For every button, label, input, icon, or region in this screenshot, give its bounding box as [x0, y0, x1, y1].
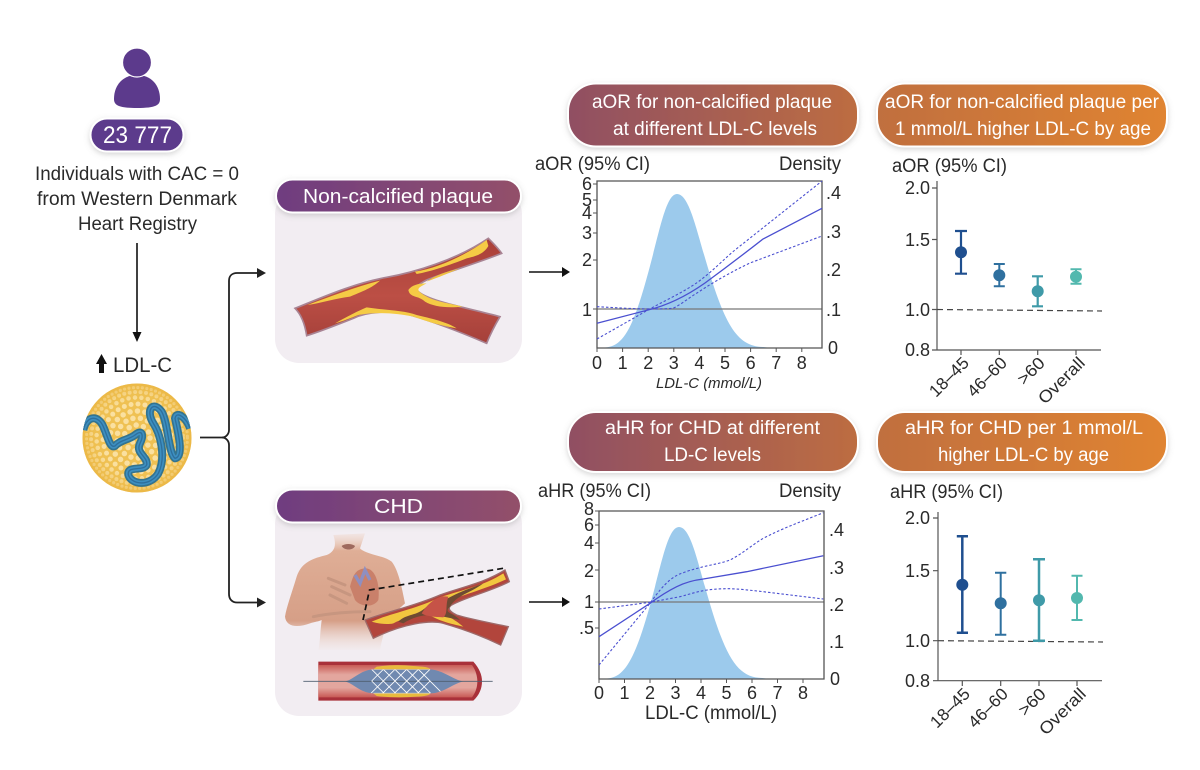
confidence limits [597, 181, 822, 339]
chart: aOR spline with density [535, 154, 841, 392]
chart: aHR spline with density: .3 [829, 558, 844, 578]
chart: aHR spline with density: 2 [645, 683, 655, 703]
chart: aOR per mmol/L by age: 1.0 [905, 300, 930, 320]
solid spline [599, 556, 823, 637]
point: Overall [1070, 269, 1082, 284]
icon: person [114, 48, 160, 108]
icon: LDL particle [82, 384, 192, 492]
text: cohort description: Individuals with CAC = 0 [35, 164, 239, 185]
chart: aHR spline with density: Density [779, 481, 841, 502]
solid spline [597, 208, 822, 323]
chart: aOR per mmol/L by age: 2.0 [905, 178, 930, 198]
chart: aHR spline with density: .4 [829, 520, 844, 540]
heading: aHR at different LD-C levels: LD-C levels [664, 445, 761, 466]
chart: aOR spline with density: 0 [828, 338, 838, 358]
heading: aHR per 1 mmol/L by age [877, 412, 1167, 472]
point: 18–45 [955, 231, 967, 274]
text: cohort description [35, 164, 239, 235]
chart: aHR spline with density: 4 [584, 533, 594, 553]
heading: CHD: CHD [374, 495, 423, 518]
point: >60 [1032, 276, 1044, 306]
heading: non-calcified plaque: Non-calcified plaque [303, 185, 493, 208]
chart: aOR spline with density: 4 [694, 353, 704, 373]
chart: aOR per mmol/L by age [892, 156, 1102, 408]
chart: aOR spline with density: 8 [797, 353, 807, 373]
chart: aHR spline with density: 7 [772, 683, 783, 703]
point: 18–45 [956, 536, 968, 633]
arrow: CHD to aHR chart [529, 597, 570, 607]
chart: aHR per mmol/L by age: >60 [1014, 684, 1050, 720]
chart: aOR spline with density: 2 [643, 353, 653, 373]
chart: aOR spline with density: 4 [582, 203, 592, 223]
chart: aHR spline with density: 0 [594, 683, 604, 703]
chart: aHR per mmol/L by age: aHR (95% CI) [890, 482, 1003, 503]
text: cohort description: from Western Denmark [37, 189, 238, 210]
chart: aHR per mmol/L by age: 18–45 [926, 684, 974, 732]
heading: non-calcified plaque [276, 180, 521, 212]
heading: aOR per 1 mmol/L by age: 1 mmol/L higher LDL-C by age [895, 119, 1151, 140]
chart: aHR spline with density: .5 [579, 618, 594, 638]
chart: aHR spline with density: .2 [829, 595, 844, 615]
density area [605, 194, 771, 348]
illustration: stent in artery [303, 662, 493, 701]
chart: aHR per mmol/L by age [890, 482, 1103, 739]
chart: aHR per mmol/L by age: 46–60 [964, 684, 1012, 732]
chart: aHR spline with density: 5 [721, 683, 732, 703]
chart: aOR spline with density: 6 [746, 353, 756, 373]
arrow: plaque to aOR chart [529, 267, 570, 277]
confidence limits [599, 513, 823, 665]
heading: aOR at different LDL-C levels: at different LDL-C levels [613, 119, 817, 140]
chart: aOR spline with density: .3 [826, 222, 841, 242]
heading: aHR at different LD-C levels [568, 412, 858, 472]
callout: dashed zoom lines [363, 568, 505, 620]
chart: aOR spline with density: aOR (95% CI) [535, 154, 650, 175]
panel: non-calcified plaque [275, 180, 522, 363]
participant count badge [90, 118, 184, 152]
chart: aOR spline with density: 5 [582, 190, 592, 210]
chart: aHR spline with density [538, 481, 844, 724]
heading: aOR at different LDL-C levels: aOR for non-calcified plaque [592, 92, 832, 113]
chart: aOR spline with density: Density [779, 154, 841, 175]
chart: aHR spline with density: 0 [830, 669, 840, 689]
panel: CHD [275, 490, 522, 716]
point: >60 [1033, 559, 1045, 641]
chart: aOR per mmol/L by age: Overall [1034, 353, 1089, 408]
chart: aHR spline with density: 3 [670, 683, 681, 703]
chart: aOR spline with density: .1 [826, 300, 841, 320]
illustration: torso with heart and diseased artery [285, 533, 509, 650]
chart: aHR spline with density: 1 [584, 592, 594, 612]
chart: aOR spline with density: 1 [618, 353, 628, 373]
chart: aOR spline with density: .4 [826, 183, 841, 203]
heading: aHR per 1 mmol/L by age: higher LDL-C by age [938, 445, 1109, 466]
chart: aOR per mmol/L by age: 46–60 [963, 353, 1011, 401]
heading: aOR per 1 mmol/L by age [877, 84, 1167, 146]
chart: aHR spline with density: 6 [747, 683, 757, 703]
chart: aHR per mmol/L by age: 1.5 [905, 561, 930, 581]
heading: aHR per 1 mmol/L by age: aHR for CHD per 1 mmol/L [905, 418, 1143, 439]
chart: aOR per mmol/L by age: 18–45 [925, 353, 973, 401]
chart: aOR spline with density: LDL-C (mmol/L) [656, 375, 762, 392]
chart: aOR per mmol/L by age: aOR (95% CI) [892, 156, 1007, 177]
text: cohort description: Heart Registry [78, 214, 197, 235]
chart: aHR per mmol/L by age: 2.0 [905, 508, 930, 528]
chart: aOR spline with density: 3 [582, 223, 592, 243]
participant count badge: 23 777 [103, 122, 172, 149]
chart: aHR spline with density: 2 [584, 561, 594, 581]
chart: aHR spline with density: 8 [584, 499, 594, 519]
chart: aOR spline with density: 5 [720, 353, 730, 373]
chart: aHR per mmol/L by age: 1.0 [905, 631, 930, 651]
chart: aHR spline with density: 4 [696, 683, 706, 703]
chart: aOR per mmol/L by age: 0.8 [905, 340, 930, 360]
label: raised LDL-C: LDL-C [113, 354, 172, 377]
heading: aHR at different LD-C levels: aHR for CHD at different [605, 418, 821, 439]
chart: aOR spline with density: .2 [826, 260, 841, 280]
heading: CHD [276, 490, 521, 522]
density area [607, 527, 770, 679]
chart: aHR per mmol/L by age: 0.8 [905, 671, 930, 691]
chart: aHR spline with density: 8 [798, 683, 808, 703]
chart: aOR per mmol/L by age: >60 [1013, 353, 1049, 389]
point: 46–60 [993, 264, 1005, 286]
chart: aHR spline with density: .1 [829, 632, 844, 652]
arrow: cohort to LDL-C [132, 243, 142, 342]
point: 46–60 [995, 573, 1007, 635]
chart: aOR spline with density: 3 [669, 353, 679, 373]
chart: aOR per mmol/L by age: 1.5 [905, 230, 930, 250]
arrow: bracket to both outcomes [200, 268, 266, 608]
chart: aHR spline with density: 1 [619, 683, 630, 703]
chart: aHR per mmol/L by age: Overall [1035, 684, 1090, 739]
chart: aOR spline with density: 2 [582, 250, 592, 270]
chart: aHR spline with density: aHR (95% CI) [538, 481, 651, 502]
illustration: artery with non-calcified plaque [295, 238, 502, 343]
chart: aHR spline with density: 6 [584, 515, 594, 535]
heading: aOR at different LDL-C levels [568, 84, 858, 146]
chart: aHR spline with density: LDL-C (mmol/L) [645, 703, 777, 724]
chart: aOR spline with density: 1 [582, 300, 592, 320]
chart: aOR spline with density: 0 [592, 353, 602, 373]
point: Overall [1071, 576, 1083, 620]
chart: aOR spline with density: 6 [582, 174, 592, 194]
heading: aOR per 1 mmol/L by age: aOR for non-calcified plaque per [885, 92, 1160, 113]
chart: aOR spline with density: 7 [771, 353, 781, 373]
